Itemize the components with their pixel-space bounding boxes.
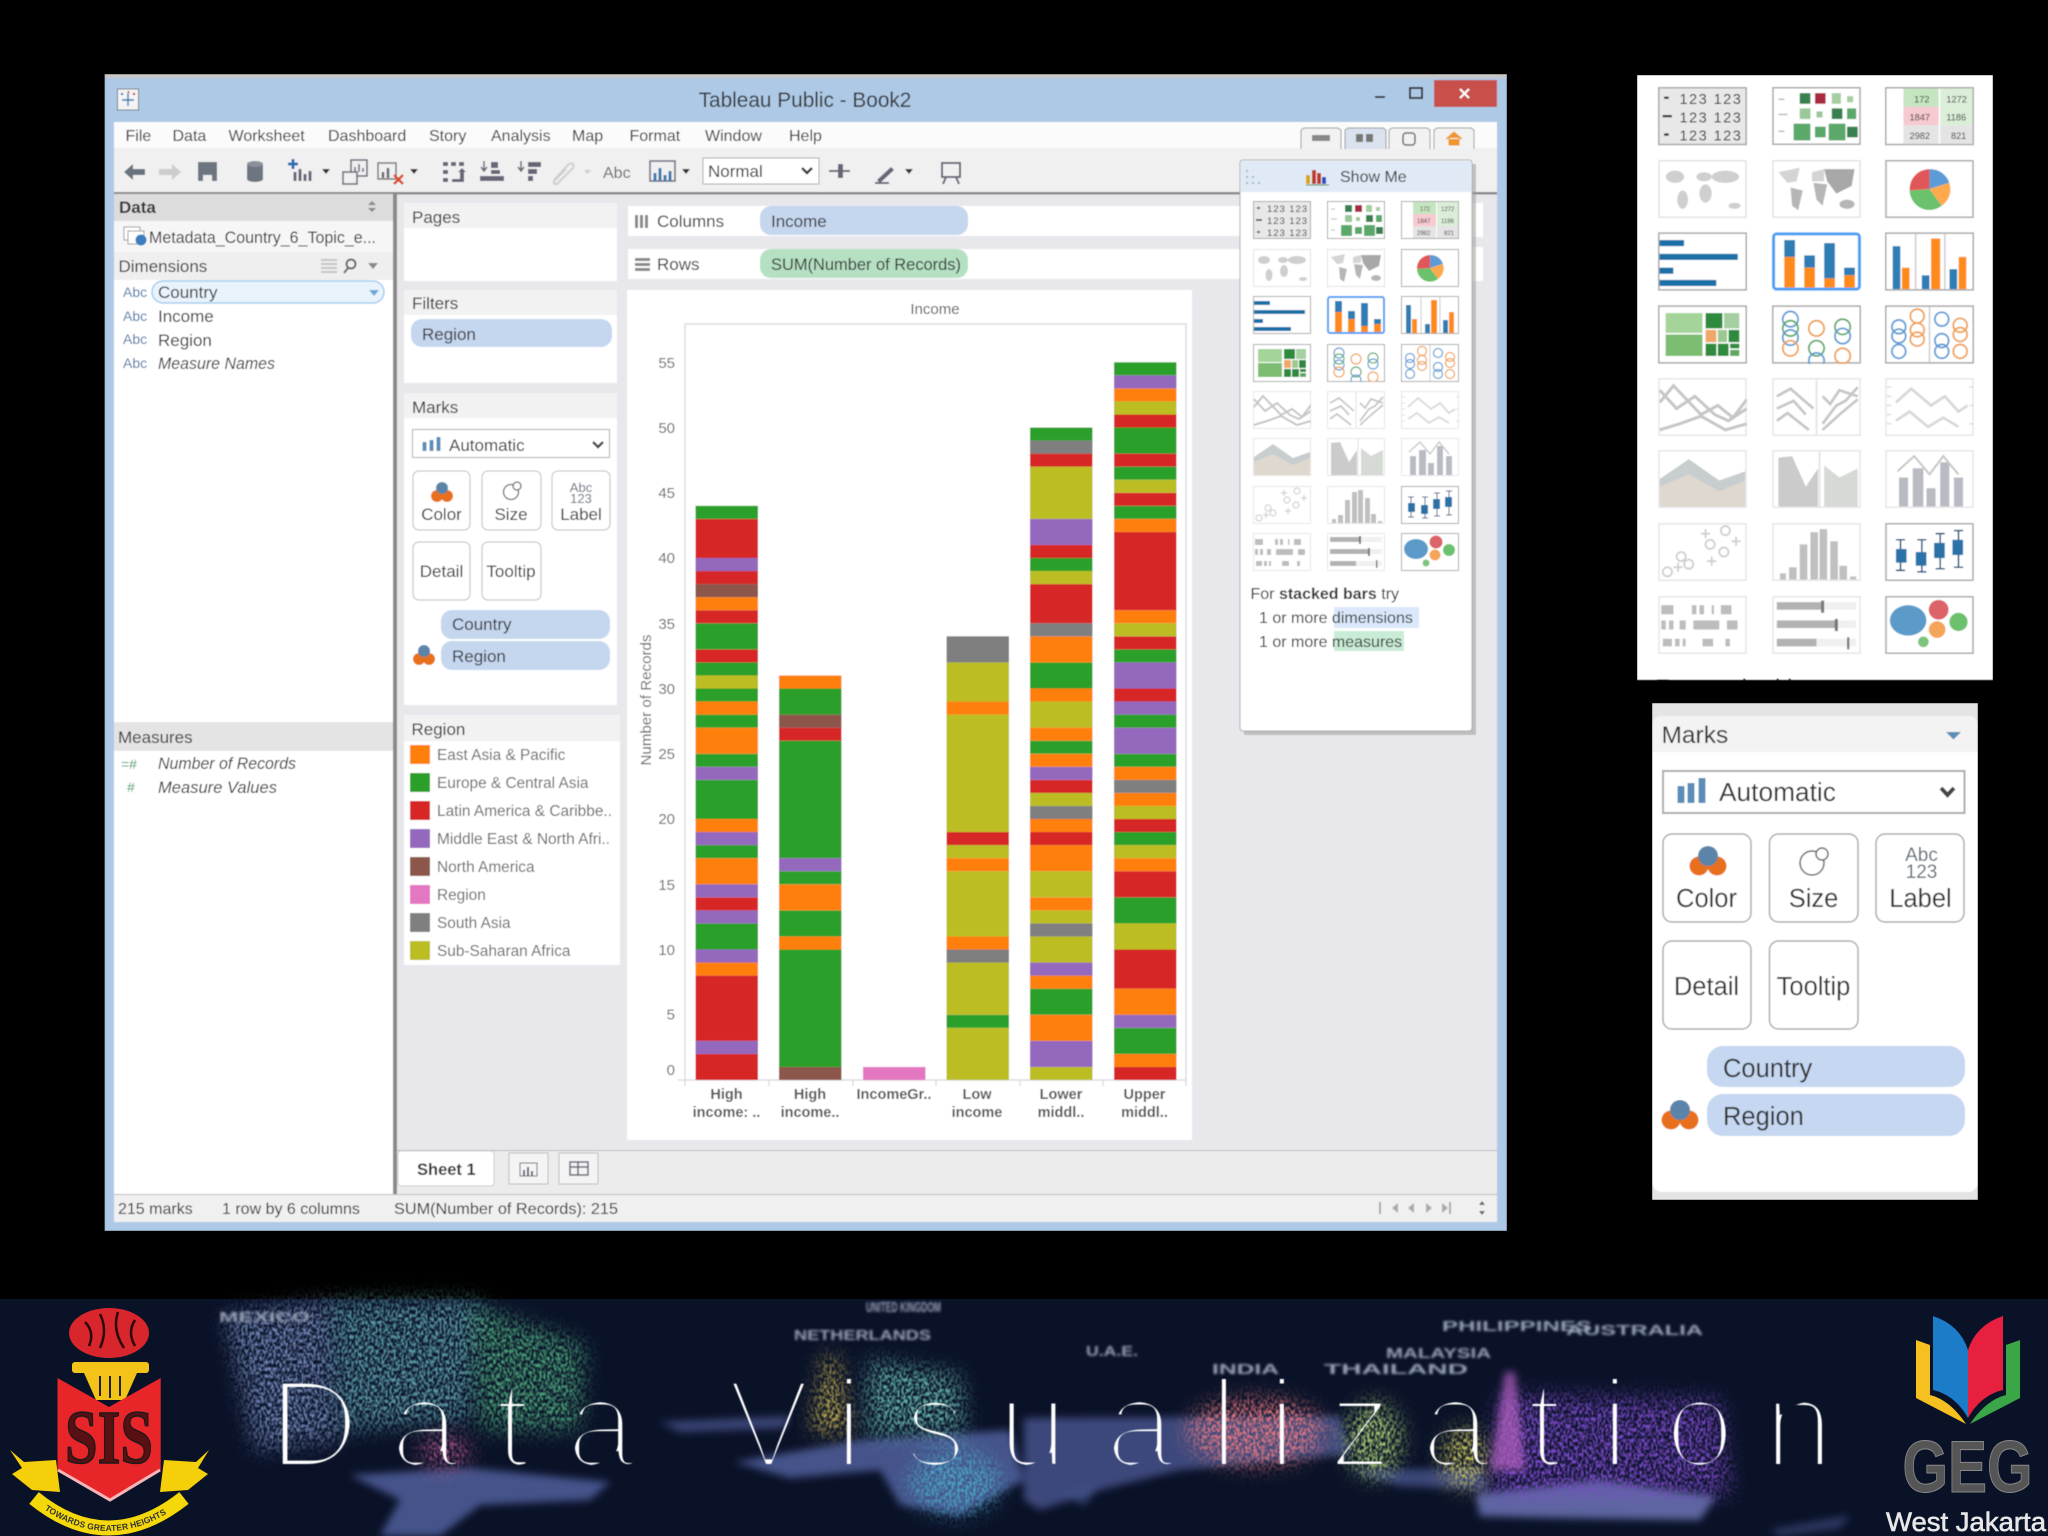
- icon: save: [198, 162, 217, 181]
- status bar: SUM(Number of Records): 215: [394, 1201, 618, 1218]
- data header: Data: [119, 198, 156, 217]
- banner: map country labels: NETHERLANDS: [794, 1327, 931, 1344]
- legend: Region: Region: [437, 887, 486, 904]
- thumbnail: stacked bars selected: [1328, 297, 1384, 333]
- GEG colourful book: [1916, 1316, 2020, 1424]
- enlarged thumbnail: heat map: [1773, 88, 1860, 144]
- icon: swap rows and columns: [443, 162, 466, 182]
- enlarged thumbnail: highlight table: 2982: [1910, 131, 1930, 141]
- enlarged thumbnail: text table: 123 123: [1679, 92, 1741, 108]
- pill: Region with color icon: [413, 641, 610, 670]
- dimension: Region: Region: [158, 331, 212, 350]
- thumbnail: treemap: [1254, 344, 1310, 382]
- dimension: Income: Abc: [123, 308, 147, 324]
- y axis labels: 50: [658, 420, 675, 437]
- enlarged thumbnail: text table: [1659, 88, 1746, 145]
- Show Me header: Show Me: [1340, 169, 1407, 186]
- tooltip button: Tooltip: [1777, 973, 1850, 1001]
- menu bar: Analysis: [491, 128, 551, 145]
- crest torch flame: [69, 1308, 149, 1358]
- thumbnail: filled map: [1328, 250, 1384, 286]
- detail button: Detail: [1674, 973, 1739, 1001]
- y axis labels: 40: [658, 550, 675, 567]
- size button: Size: [1789, 885, 1838, 913]
- y axis labels: 20: [658, 811, 675, 828]
- color button: [413, 471, 470, 530]
- bar: Low income: [946, 636, 1009, 1080]
- chart: stacked bars of records by income and region: [627, 290, 1192, 1140]
- enlarged thumbnail: symbol map: [1659, 161, 1746, 217]
- enlarged thumbnail: side by side circles: [1886, 306, 1973, 363]
- Show Me hint text: [1250, 586, 1419, 651]
- dimension: Country selected pill: Abc: [123, 284, 147, 300]
- panel: Show Me popup: [1240, 160, 1476, 735]
- crest SIS letters: SIS: [65, 1396, 153, 1480]
- enlarged thumbnail: treemap: [1659, 306, 1746, 363]
- bar: High income OECD: [696, 506, 758, 1080]
- measure: Number of Records: Number of Records: [158, 754, 296, 773]
- status bar: 215 marks: [118, 1201, 193, 1218]
- Show Me hint text: 1 or more dimensions: [1259, 610, 1413, 627]
- icon: sort ascending: [480, 161, 504, 181]
- chart title: Income: Income: [910, 301, 960, 318]
- data header: [114, 194, 393, 221]
- measures header: [114, 722, 393, 751]
- dimension: Country selected pill: [123, 281, 384, 303]
- crest torch base: [72, 1362, 149, 1400]
- banner: map country labels: PHILIPPINES: [1442, 1318, 1592, 1335]
- detail button: [1663, 941, 1751, 1029]
- banner: red point cloud: [1186, 1398, 1326, 1466]
- enlarged thumbnail: highlight table: 172: [1914, 94, 1929, 104]
- y axis labels: 45: [658, 485, 675, 502]
- banner: world map landmasses: [350, 1416, 1850, 1536]
- pill: Country: Country: [452, 615, 512, 634]
- Show Me header: [1241, 161, 1471, 192]
- menu bar: Dashboard: [328, 128, 406, 145]
- icon: application logo: [118, 89, 138, 110]
- Rows shelf: SUM(Number of Records): [771, 256, 961, 274]
- banner: magenta point cloud: [419, 1434, 471, 1470]
- panel: Filters card: Region: [422, 325, 476, 344]
- view tab icons: [1312, 132, 1462, 145]
- pill: Country: [1707, 1046, 1965, 1087]
- x axis labels: middl..: [1121, 1105, 1168, 1121]
- panel: data pane: [114, 194, 397, 1194]
- enlarged thumbnail: text table: 123 123: [1679, 110, 1741, 126]
- legend: Middle East & North Africa: Middle East & North Afri..: [437, 831, 610, 848]
- thumbnail: discrete lines: [1328, 392, 1384, 428]
- banner: map country labels: AUSTRALIA: [1566, 1322, 1703, 1339]
- x axis labels: income: [952, 1105, 1002, 1121]
- data source row: [114, 221, 393, 252]
- marks type selector: [412, 430, 610, 458]
- enlarged thumbnail: continuous area: [1659, 451, 1746, 507]
- panel: Pages card: [404, 203, 617, 281]
- pill: Region with color icon: Region: [452, 647, 506, 666]
- Show Me hint text: 1 or more measures: [1259, 634, 1402, 651]
- panel: Tableau Public application window: [104, 74, 1507, 1231]
- banner: teal point cloud: [330, 1300, 480, 1430]
- thumbnail: bullet graph: [1328, 534, 1384, 570]
- icon: back arrow: [124, 164, 145, 180]
- x axis labels: income..: [781, 1105, 839, 1121]
- label button: Abc: [570, 480, 593, 495]
- bar: High income non-OECD: [779, 675, 842, 1080]
- legend: North America: North America: [437, 859, 535, 876]
- enlarged thumbnail: scatter plot: [1659, 524, 1746, 580]
- panel: Marks card: Marks: [412, 398, 458, 417]
- color button: Color: [421, 505, 462, 524]
- enlarged thumbnail: discrete lines: [1773, 379, 1860, 435]
- panel: enlarged Marks card: [1652, 703, 1978, 1200]
- panel: Region colour legend: [404, 715, 620, 965]
- enlarged thumbnail: continuous lines: [1659, 379, 1747, 435]
- measures header: Measures: [118, 728, 193, 747]
- banner: map country labels: MALAYSIA: [1386, 1345, 1491, 1362]
- menu bar: Window: [705, 128, 762, 145]
- banner: map country labels: MEXICO: [219, 1309, 310, 1326]
- x axis labels: High: [794, 1087, 826, 1103]
- fit selector: Normal: Normal: [708, 162, 763, 181]
- marks type selector: Automatic: [1719, 777, 1836, 807]
- menu bar: Format: [630, 128, 681, 145]
- banner: map country labels: UNITED KINGDOM: [866, 1299, 941, 1316]
- size button: [482, 471, 541, 530]
- y axis labels: [658, 355, 675, 1079]
- icon: new worksheet: [288, 159, 330, 181]
- enlarged thumbnail: side by side bars: [1886, 233, 1973, 290]
- window controls: [1375, 80, 1497, 107]
- banner: map country labels: INDIA: [1212, 1361, 1279, 1378]
- dimensions header: Dimensions: [118, 257, 207, 276]
- thumbnail: dual combination: [1402, 438, 1458, 476]
- dimension: Income: Income: [158, 307, 214, 326]
- y axis title: Number of Records: [638, 634, 655, 766]
- crest ribbons: [10, 1450, 209, 1492]
- sheet navigation arrows: [1379, 1201, 1485, 1215]
- crest motto: TOWARDS GREATER HEIGHTS: [46, 1504, 166, 1531]
- marks menu triangle: [1946, 732, 1961, 740]
- Columns shelf: Income: [771, 212, 827, 231]
- tooltip button: [482, 542, 541, 600]
- status bar: 1 row by 6 columns: [222, 1201, 360, 1218]
- icon: sort descending: [518, 161, 541, 181]
- panel: Filters card: [404, 290, 617, 383]
- marks type selector: Automatic: [449, 436, 525, 455]
- banner: cyan and green point cloud: [865, 1360, 965, 1435]
- enlarged thumbnail: packed bubbles: [1886, 597, 1973, 653]
- x axis labels: [693, 1087, 1168, 1121]
- dimension: Measure Names: Abc: [123, 355, 147, 371]
- x axis labels: Upper: [1124, 1087, 1166, 1103]
- pill: Region with color icon: Region: [1723, 1103, 1804, 1131]
- cropped hint text at panel bottom: For stacked bars try: [1655, 675, 1867, 702]
- thumbnail: pie chart: [1402, 250, 1458, 286]
- enlarged thumbnail: pie chart: [1886, 161, 1973, 217]
- dimension: Income: [123, 307, 214, 326]
- enlarged thumbnail: highlight table: 1847: [1910, 113, 1930, 123]
- thumbnail: highlight table: 1847: [1417, 219, 1431, 225]
- panel: Marks card: [404, 393, 617, 705]
- icon: data source cylinder: [247, 161, 263, 182]
- thumbnail: scatter plot: [1254, 486, 1310, 524]
- y axis labels: 0: [667, 1062, 675, 1079]
- detail button: Detail: [420, 562, 463, 581]
- label button: [1876, 834, 1964, 922]
- logo: SIS school crest: [10, 1308, 209, 1536]
- label button: 123: [570, 491, 592, 506]
- banner: purple point cloud: [1490, 1395, 1730, 1500]
- thumbnail: text table: [1254, 202, 1310, 239]
- menu bar: Help: [789, 128, 822, 145]
- crest red shield book: [58, 1378, 161, 1500]
- thumbnail: packed bubbles: [1402, 534, 1458, 570]
- bar: Lower middle income: [1030, 428, 1092, 1080]
- bar: Upper middle income: [1114, 362, 1176, 1080]
- thumbnail: highlight table: 172: [1420, 207, 1431, 213]
- icon: duplicate sheet: [343, 160, 367, 184]
- thumbnail: discrete area: [1328, 438, 1384, 476]
- enlarged thumbnail: filled map: [1773, 161, 1860, 217]
- window title: Tableau Public - Book2: [699, 89, 911, 112]
- data source row: Metadata_Country_6_Topic_e...: [149, 228, 376, 247]
- thumbnail: text table: 123 123: [1267, 216, 1307, 227]
- enlarged thumbnail: circle views: [1773, 306, 1860, 368]
- thumbnail: heat map: [1328, 202, 1384, 238]
- icon: paperclip: [554, 163, 574, 184]
- label button: Abc: [1905, 845, 1938, 866]
- legend: East Asia & Pacific: East Asia & Pacific: [437, 747, 566, 764]
- color button: [1663, 834, 1751, 922]
- banner: pink spike: [1490, 1372, 1525, 1470]
- dimension: Region: Abc: [123, 331, 147, 347]
- label button: Label: [560, 505, 602, 524]
- measure: Number of Records: =#: [121, 756, 137, 772]
- y axis labels: 10: [658, 942, 675, 959]
- enlarged thumbnail: text table: 123 123: [1679, 129, 1741, 145]
- x axis labels: middl..: [1038, 1105, 1084, 1121]
- enlarged thumbnail: dual lines: [1886, 379, 1974, 435]
- banner: map country labels: [219, 1299, 1703, 1378]
- panel: enlarged Show Me thumbnails: [1637, 75, 1993, 702]
- thumbnail: histogram: [1328, 486, 1384, 524]
- legend: Europe & Central Asia: Europe & Central Asia: [437, 775, 589, 792]
- thumbnail: highlight table: 821: [1444, 231, 1455, 237]
- banner: data visualization footer: [0, 1286, 2048, 1536]
- label button: 123: [1906, 862, 1937, 883]
- thumbnail: side by side bars: [1402, 296, 1458, 334]
- legend: Region: [410, 885, 486, 904]
- icon: chart type button: [650, 161, 690, 181]
- view tabs: [1301, 128, 1474, 149]
- Rows shelf: Rows: [657, 255, 700, 274]
- dimension: Country selected pill: Country: [158, 283, 218, 302]
- thumbnail: horizontal bars: [1254, 296, 1310, 334]
- marks heading: Marks: [1662, 722, 1728, 749]
- icon: new worksheet tab: [509, 1153, 548, 1184]
- y axis labels: 25: [658, 746, 675, 763]
- color button: Color: [1676, 885, 1737, 913]
- x axis labels: income: ..: [693, 1105, 760, 1121]
- tooltip button: [1770, 941, 1858, 1029]
- Columns shelf: [628, 203, 1483, 237]
- thumbnail: text table: 123 123: [1267, 228, 1307, 239]
- thumbnail: continuous area: [1254, 438, 1310, 476]
- x axis labels: High: [710, 1087, 743, 1103]
- menu bar: [114, 122, 1497, 148]
- marks type selector: [1663, 771, 1964, 813]
- thumbnail: side by side circles: [1402, 344, 1458, 382]
- pill: Region with color icon: [1662, 1094, 1965, 1136]
- y axis labels: 5: [667, 1006, 675, 1024]
- y axis labels: 15: [658, 877, 675, 894]
- thumbnail: box plot: [1402, 486, 1458, 524]
- status bar: [114, 1194, 1497, 1222]
- pill: Country: [441, 610, 610, 639]
- enlarged thumbnail: horizontal bars: [1659, 233, 1746, 290]
- size button: [1770, 834, 1858, 922]
- enlarged thumbnail: highlight table: 1186: [1946, 113, 1966, 123]
- thumbnail: continuous lines: [1254, 392, 1311, 428]
- icon: presentation: [942, 163, 960, 184]
- thumbnail: highlight table: 1272: [1441, 207, 1455, 213]
- toolbar Abc label button: Abc: [603, 165, 631, 182]
- icon: clear sheet: [378, 163, 418, 184]
- y axis labels: 35: [658, 616, 675, 633]
- legend: Latin America & Caribbean: Latin America & Caribbe..: [437, 803, 612, 820]
- enlarged thumbnail: box plot: [1886, 524, 1973, 580]
- pill: Country: Country: [1723, 1055, 1813, 1083]
- banner: green point cloud: [470, 1305, 585, 1430]
- label button: [552, 471, 610, 530]
- thumbnail: text table: 123 123: [1267, 204, 1307, 215]
- client area background: [114, 122, 1497, 1222]
- icon: pen: [875, 167, 913, 184]
- banner: yellow point cloud: [812, 1355, 850, 1432]
- icon: new dashboard tab: [559, 1153, 598, 1184]
- thumbnail: highlight table: 1186: [1441, 219, 1455, 225]
- banner: map country labels: U.A.E.: [1086, 1343, 1138, 1360]
- detail button: [413, 542, 470, 600]
- enlarged thumbnail: highlight table: 1272: [1946, 94, 1967, 104]
- dimensions header: [114, 252, 393, 280]
- y axis labels: 30: [658, 681, 675, 698]
- Rows shelf: [628, 247, 1483, 281]
- fit selector: Normal: [703, 158, 819, 184]
- label button: Label: [1889, 885, 1952, 913]
- thumbnail: circle views: [1328, 344, 1384, 385]
- thumbnail: highlight table: 2982: [1417, 231, 1431, 237]
- Show Me hint text: For stacked bars try: [1250, 586, 1399, 603]
- x axis labels: Low: [962, 1087, 992, 1103]
- size button: Size: [494, 505, 528, 524]
- dimension: Region: [123, 331, 212, 350]
- logo: GEG West Jakarta: [1886, 1316, 2047, 1536]
- icon: pin: [829, 165, 850, 177]
- menu bar: File: [126, 128, 151, 145]
- banner: cyan ground cloud: [909, 1450, 1001, 1514]
- enlarged thumbnail: highlight table: [1886, 88, 1973, 145]
- panel: Filters card: Filters: [412, 294, 458, 313]
- measure: Measure Values: Measure Values: [158, 778, 277, 797]
- menu bar: Story: [429, 128, 466, 145]
- thumbnail: highlight table: [1402, 202, 1458, 238]
- toolbar: [114, 148, 1497, 194]
- enlarged thumbnail: highlight table: 821: [1951, 131, 1966, 141]
- Columns shelf: Columns: [657, 212, 724, 231]
- menu bar: Map: [572, 128, 603, 145]
- enlarged thumbnail: histogram: [1773, 524, 1860, 580]
- legend: Sub-Saharan Africa: Sub-Saharan Africa: [437, 943, 571, 960]
- enlarged thumbnail: bullet graph: [1773, 597, 1860, 653]
- banner: yellow point cloud south: [1442, 1428, 1488, 1488]
- enlarged thumbnail: dual combination: [1886, 451, 1973, 507]
- thumbnail: dual lines: [1402, 392, 1459, 428]
- panel: Pages card: Pages: [412, 208, 460, 227]
- sheet tab bar: Sheet 1: [417, 1161, 476, 1179]
- y axis labels: 55: [658, 355, 675, 372]
- legend: South Asia: South Asia: [437, 915, 511, 932]
- x axis labels: IncomeGr..: [857, 1087, 931, 1103]
- tooltip button: Tooltip: [486, 562, 536, 581]
- banner: map country labels: THAILAND: [1324, 1361, 1468, 1378]
- banner: lime point cloud: [1346, 1402, 1402, 1478]
- panel: Region colour legend: Region: [412, 720, 465, 739]
- legend: North America: [410, 857, 535, 876]
- measure: Measure Values: #: [127, 779, 135, 795]
- menu bar: Worksheet: [228, 128, 305, 145]
- dimension: Measure Names: Measure Names: [158, 354, 275, 373]
- enlarged thumbnail: gantt: [1659, 597, 1746, 653]
- bar: IncomeGroup: [863, 1067, 926, 1080]
- icon: forward arrow: [159, 164, 181, 180]
- thumbnail: gantt: [1254, 534, 1310, 570]
- thumbnail: symbol map: [1254, 250, 1310, 286]
- menu bar: Data: [172, 128, 206, 145]
- enlarged thumbnail: discrete area: [1773, 451, 1860, 507]
- banner title: Data Visualization: DataVisualization: [269, 1355, 1834, 1494]
- legend: South Asia: [410, 913, 511, 932]
- enlarged thumbnail: stacked bars selected: [1774, 234, 1859, 289]
- x axis labels: Lower: [1040, 1087, 1083, 1103]
- sheet tab bar: [397, 1150, 1497, 1194]
- banner: blue point cloud: [225, 1300, 340, 1450]
